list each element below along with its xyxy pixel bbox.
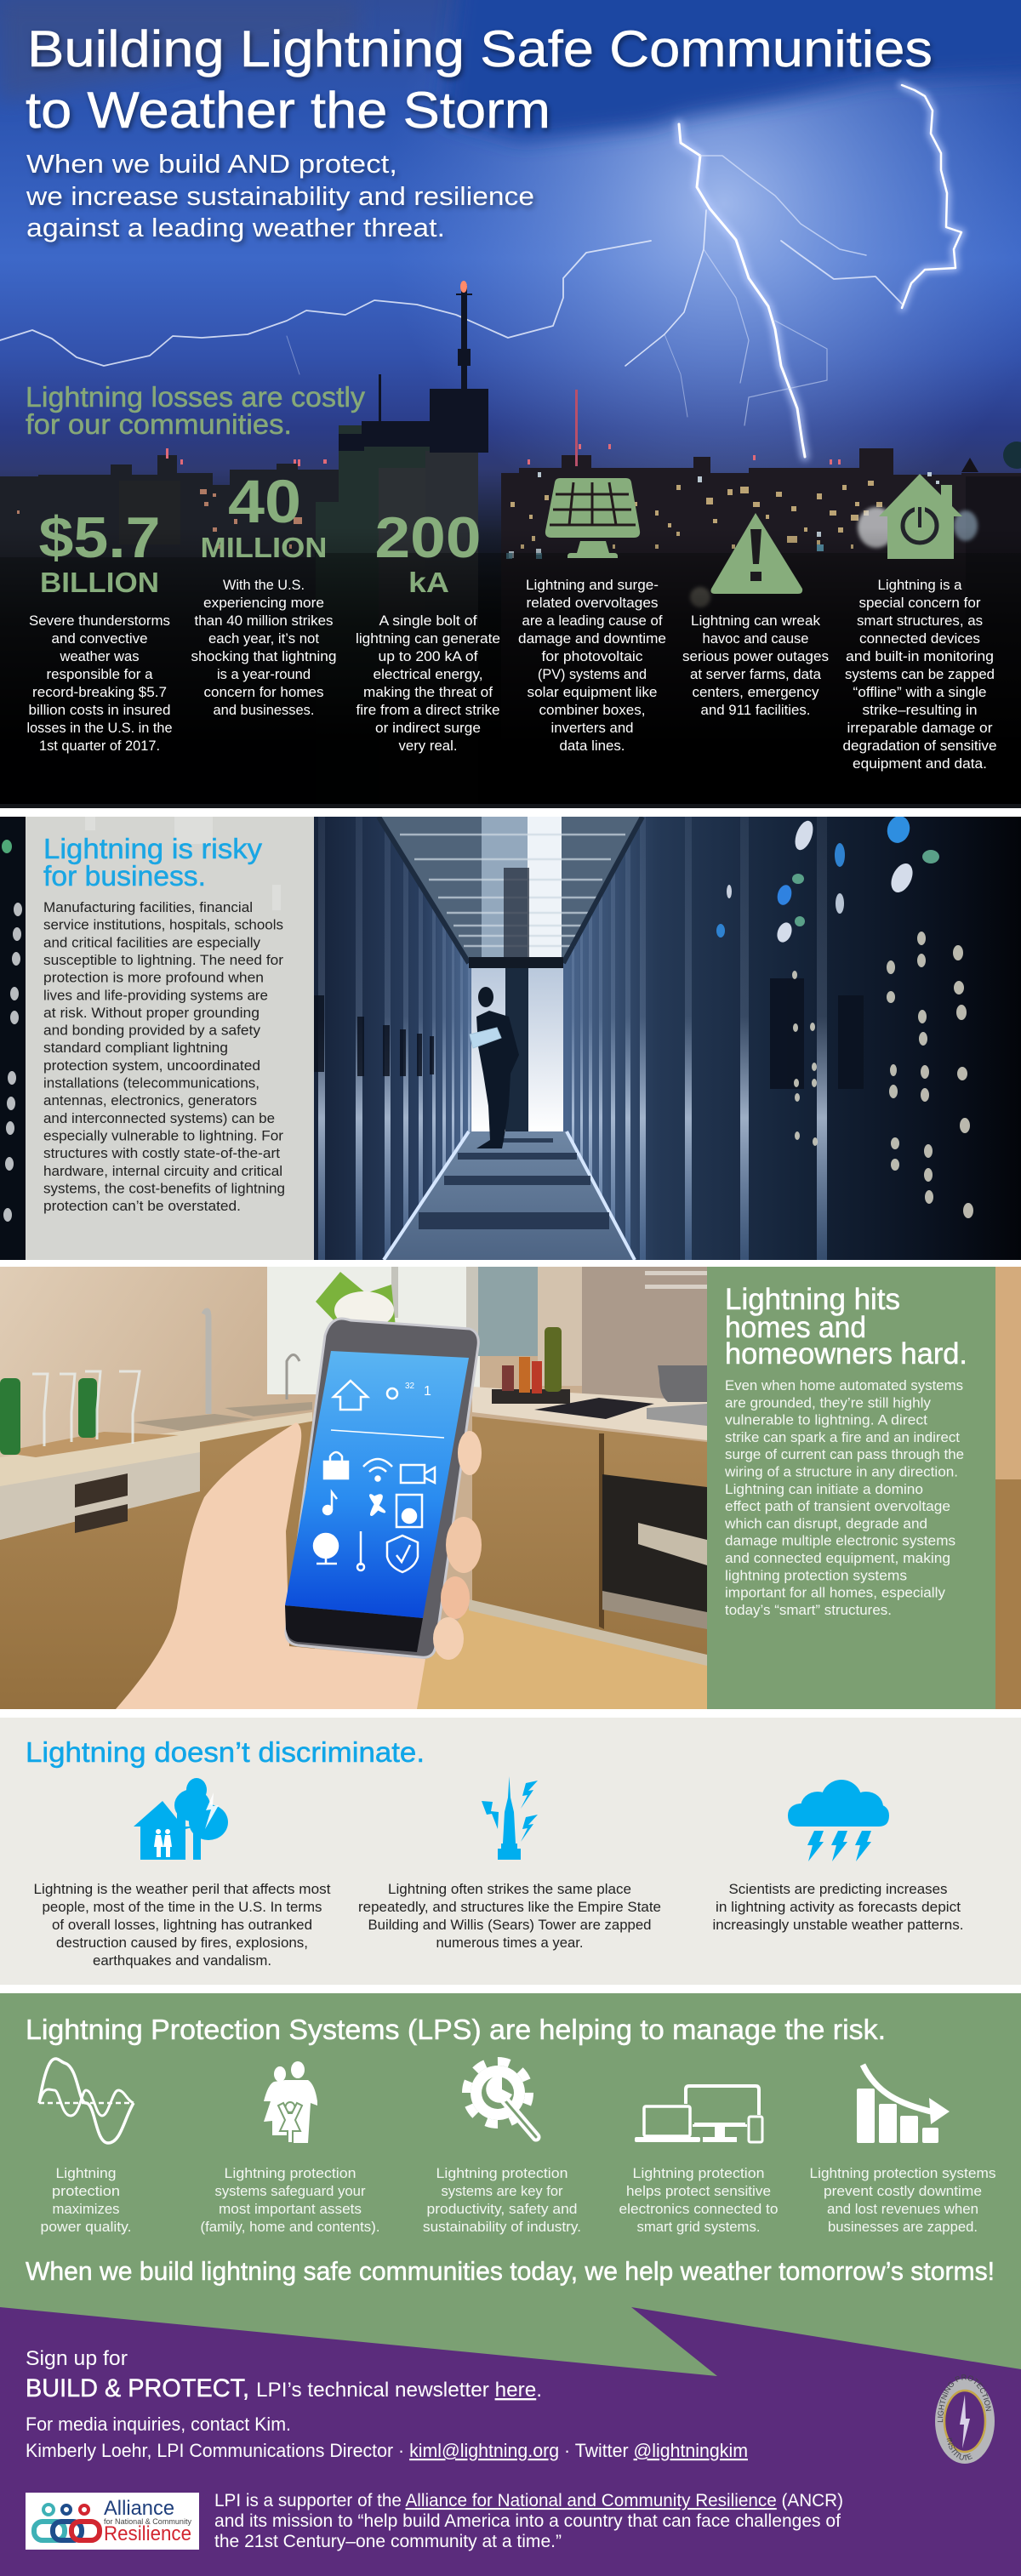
text: sensitive electronics: electronics connected to — [619, 2201, 778, 2217]
stat: solar overvoltage: combiner boxes, — [539, 702, 645, 718]
LPI seal: INSTITUTE — [946, 2438, 973, 2460]
text: sensitive electronics: Lightning protection — [633, 2165, 764, 2181]
stat: smart structures: special concern for — [859, 595, 981, 611]
title: to Weather the Storm — [26, 82, 550, 139]
text block: business risk: at risk. Without proper grounding — [43, 1005, 260, 1021]
panel: hero and lightning losses — [0, 0, 1021, 808]
stat: 40 million: With the U.S. — [223, 577, 305, 593]
text: industry: systems are key for — [441, 2183, 563, 2199]
stat: $5.7 billion — [27, 505, 172, 754]
stat: solar overvoltage: are a leading cause of — [522, 613, 663, 629]
stat: solar overvoltage: solar equipment like — [528, 684, 657, 700]
text block: business risk: hardware, internal circuity and critical — [43, 1163, 282, 1179]
heading: risky for business: for business. — [43, 860, 206, 892]
stat: 200 kA: very real. — [398, 738, 458, 754]
floor — [417, 1608, 707, 1709]
left cabinets — [0, 1421, 315, 1709]
stat: 200 kA: electrical energy, — [373, 666, 483, 682]
stat: power outages: serious power outages — [682, 648, 829, 664]
lightning bolts — [0, 85, 961, 457]
newsletter sign up: LPI’s technical newsletter here. — [256, 2379, 542, 2402]
text: same place repeatedly: Lightning often strikes the same place — [388, 1881, 631, 1897]
text block: business risk: especially vulnerable to lightning. For — [43, 1128, 283, 1143]
stat: 200 kA — [356, 505, 500, 754]
text block: home risk: wiring of a structure in any direction. — [724, 1463, 958, 1480]
stat: 40 million: MILLION — [201, 532, 327, 563]
text block: home risk: and connected equipment, making — [725, 1550, 950, 1566]
text: predicting increases: Scientists are predicting increases — [728, 1881, 948, 1897]
LPI seal: LIGHTNING PROTECTION — [938, 2374, 992, 2423]
stat: smart structures: and built-in monitoring — [846, 648, 994, 664]
heading: lightning losses: for our communities. — [26, 408, 292, 440]
right counter and appliances — [472, 1387, 707, 1440]
stat: 40 million: than 40 million strikes — [194, 613, 334, 629]
text: power quality: Lightning — [56, 2165, 116, 2181]
icon: declining bar chart — [857, 2065, 950, 2143]
text block: business risk: structures with costly state-of-the-art — [43, 1145, 280, 1161]
stat: 40 million: experiencing more — [203, 595, 324, 611]
text panel — [707, 1267, 995, 1709]
stat: smart structures: Lightning is a — [878, 577, 962, 593]
title: Building Lightning Safe Communities — [27, 20, 933, 77]
text: safeguard assets: (family, home and contents). — [201, 2219, 379, 2235]
stat: 40 million — [191, 469, 337, 718]
text block: home risk: Even when home automated systems — [725, 1377, 963, 1393]
stat: smart structures: systems can be zapped — [845, 666, 995, 682]
text: power quality: protection — [52, 2183, 120, 2199]
text: safeguard assets: systems safeguard your — [214, 2183, 366, 2199]
newsletter sign up: Sign up for — [26, 2347, 128, 2370]
heading: lightning losses: Lightning losses are costly — [26, 381, 366, 413]
ANCR statement — [214, 2491, 843, 2551]
media contact: Kimberly Loehr, LPI Communications Director · kiml@lightning.org · Twitter @lightningkim — [26, 2440, 748, 2461]
text: power quality: maximizes — [53, 2201, 119, 2217]
stat: smart structures: degradation of sensitive — [842, 738, 997, 754]
stat: smart structures: connected devices — [859, 630, 980, 647]
icon: gear and wrench — [466, 2061, 536, 2137]
text: downtime: Lightning protection systems — [810, 2165, 995, 2181]
subtitle — [26, 149, 534, 242]
text block: business risk: Manufacturing facilities, financial — [43, 899, 253, 915]
text: same place repeatedly: repeatedly, and structures like the Empire State — [358, 1899, 661, 1915]
stat: $5.7 billion: $5.7 — [39, 505, 160, 570]
subtitle: against a leading weather threat. — [26, 213, 445, 242]
stat: solar overvoltage: (PV) systems and — [538, 666, 647, 682]
text block: business risk: protection is more profound when — [43, 970, 264, 986]
stat: $5.7 billion: record-breaking $5.7 — [32, 684, 167, 700]
stat: $5.7 billion: losses in the U.S. in the — [27, 720, 172, 736]
stat: 40 million: is a year-round — [217, 666, 311, 682]
text block: home risk: are grounded, they’re still highly — [725, 1394, 931, 1411]
text: weather peril: Lightning is the weather peril that affects most — [34, 1881, 331, 1897]
stat: solar overvoltage: inverters and — [551, 720, 633, 736]
text: predicting increases: increasingly unstable weather patterns. — [713, 1917, 963, 1933]
ANCR logo: Alliance — [104, 2497, 174, 2520]
subtitle: we increase sustainability and resilience — [26, 181, 534, 211]
ANCR logo: Resilience — [104, 2522, 191, 2545]
text block: business risk: service institutions, hospitals, schools — [43, 917, 283, 933]
text: downtime: businesses are zapped. — [828, 2219, 978, 2235]
text block: business risk: and interconnected systems) can be — [43, 1110, 275, 1126]
text block: home risk: Lightning can initiate a domino — [725, 1481, 923, 1497]
text block: business risk: installations (telecommunications, — [43, 1075, 260, 1091]
text: industry: sustainability of industry. — [423, 2219, 581, 2235]
heading: hits homes — [725, 1283, 967, 1371]
stat: solar overvoltage — [518, 478, 666, 754]
text: same place repeatedly: numerous times a year. — [436, 1935, 584, 1951]
stat: solar overvoltage: damage and downtime — [518, 630, 666, 647]
heading: risky for business — [43, 833, 263, 892]
city skyline at night — [0, 281, 1021, 808]
stat: power outages — [682, 513, 829, 718]
stat: $5.7 billion: weather was — [60, 648, 140, 664]
stat: smart structures: equipment and data. — [853, 755, 987, 772]
stat: $5.7 billion: Severe thunderstorms — [29, 613, 170, 629]
stat: smart structures: “offline” with a single — [853, 684, 987, 700]
stat: smart structures — [842, 474, 997, 772]
ANCR logo: for National & Community — [104, 2517, 191, 2526]
ANCR logo — [26, 2493, 199, 2550]
text block: business risk: antennas, electronics, generators — [43, 1092, 257, 1108]
text block: home risk: damage multiple electronic systems — [725, 1533, 955, 1549]
kitchen photo — [0, 1267, 1021, 1709]
heading: Lightning Protection Systems (LPS) are helping to manage the risk. — [26, 2014, 886, 2045]
text block: business risk: susceptible to lightning. The need for — [43, 952, 283, 968]
radio tower — [339, 285, 488, 453]
faucets and glasses — [204, 1311, 208, 1414]
hand holding smartphone: 32 — [405, 1382, 415, 1391]
stat: smart structures: irreparable damage or — [847, 720, 993, 736]
LPI seal — [935, 2374, 995, 2464]
stat: solar overvoltage: related overvoltages — [526, 595, 659, 611]
title — [26, 29, 935, 134]
text: weather peril: of overall losses, lightning has outranked — [52, 1917, 312, 1933]
server rack lights — [716, 813, 973, 1218]
text: downtime: and lost revenues when — [827, 2201, 978, 2217]
stat: $5.7 billion: billion costs in insured — [29, 702, 170, 718]
icon: connected devices — [635, 2086, 762, 2142]
text block: home risk — [724, 1377, 964, 1618]
icon: family — [264, 2061, 317, 2143]
heading: hits homes: Lightning hits — [725, 1283, 900, 1316]
newsletter sign up — [26, 2347, 542, 2402]
hand holding smartphone — [116, 1319, 482, 1709]
icon: house, tree and family — [134, 1778, 228, 1860]
text: sensitive electronics — [619, 2165, 778, 2235]
phone app icons — [314, 1381, 444, 1572]
text panel — [26, 817, 314, 1260]
stat: 200 kA: fire from a direct strike — [356, 702, 500, 718]
icon: power sine waves — [39, 2059, 134, 2143]
text block: business risk: and critical facilities are especially — [43, 934, 260, 950]
stat: 200 kA: lightning can generate — [356, 630, 500, 647]
text: same place repeatedly: Building and Willis (Sears) Tower are zapped — [368, 1917, 652, 1933]
heading: hits homes: homes and — [725, 1311, 866, 1344]
stat: smart structures: strike–resulting in — [863, 702, 977, 718]
text block: business risk: lives and life-providing systems are — [43, 987, 268, 1003]
storm sky photo — [0, 0, 1021, 808]
heading: Lightning doesn’t discriminate. — [26, 1736, 425, 1768]
hand holding smartphone: 1 — [424, 1384, 431, 1399]
stat: 200 kA: A single bolt of — [379, 613, 477, 629]
icon: house with power button — [879, 474, 962, 559]
stat: 40 million: shocking that lightning — [191, 648, 337, 664]
stat: power outages: Lightning can wreak — [691, 613, 820, 629]
tree line — [0, 553, 712, 609]
ANCR statement: LPI is a supporter of the Alliance for National and Community Resilience (ANCR) — [214, 2491, 843, 2510]
panel: lightning hits homes — [0, 1267, 1021, 1709]
text block: business risk: and bonding provided by a safety — [43, 1023, 260, 1038]
text: sensitive electronics: smart grid systems. — [636, 2219, 761, 2235]
text block: business risk: standard compliant lightning — [43, 1040, 228, 1056]
plant — [316, 1272, 396, 1327]
stat: $5.7 billion: 1st quarter of 2017. — [39, 738, 160, 754]
left edge lights — [2, 840, 22, 1222]
left counter — [0, 1412, 312, 1489]
stat: solar overvoltage: for photovoltaic — [541, 648, 643, 664]
panel: sign up footer — [0, 2307, 1021, 2576]
text block: home risk: which can disrupt, degrade and — [724, 1515, 927, 1531]
text: power quality: power quality. — [41, 2219, 131, 2235]
media contact — [26, 2414, 748, 2461]
text: industry: Lightning protection — [436, 2165, 568, 2181]
ANCR statement: the 21st Century–one community at a time.” — [214, 2532, 562, 2551]
stat: $5.7 billion: responsible for a — [46, 666, 153, 682]
text block: business risk: systems, the cost-benefits of lightning — [43, 1181, 285, 1196]
text: weather peril: destruction caused by fires, explosions, — [56, 1935, 308, 1951]
text: industry: productivity, safety and — [427, 2201, 577, 2217]
text block: home risk: effect path of transient overvoltage — [725, 1498, 950, 1514]
subtitle: When we build AND protect, — [26, 149, 397, 179]
text: downtime — [810, 2165, 995, 2235]
person with laptop — [470, 987, 519, 1148]
text: downtime: prevent costly downtime — [824, 2183, 982, 2199]
city window lights — [510, 481, 894, 549]
icon: solar panel — [545, 478, 640, 558]
stat: power outages: centers, emergency — [693, 684, 819, 700]
stat: 40 million: each year, it’s not — [208, 630, 319, 647]
text: weather peril: earthquakes and vandalism. — [93, 1952, 271, 1969]
stat: smart structures: smart structures, as — [857, 613, 983, 629]
text: safeguard assets: most important assets — [219, 2201, 362, 2217]
stat: power outages: at server farms, data — [690, 666, 822, 682]
icon: tower struck by lightning — [482, 1776, 538, 1860]
stat: solar overvoltage: Lightning and surge- — [526, 577, 659, 593]
text block: home risk: strike can spark a fire and an indirect — [725, 1429, 960, 1445]
stat: 200 kA: 200 — [374, 505, 482, 570]
stat: $5.7 billion: BILLION — [40, 567, 159, 598]
stat: 200 kA: or indirect surge — [375, 720, 481, 736]
text: weather peril — [34, 1881, 331, 1969]
stat: 200 kA: kA — [408, 567, 449, 598]
closing statement: When we build lightning safe communities today, we help weather tomorrow’s storms! — [26, 2256, 995, 2286]
text block: home risk: surge of current can pass through the — [725, 1446, 964, 1462]
panel: lightning is risky for business — [0, 813, 1021, 1260]
text: predicting increases — [713, 1881, 963, 1933]
text: safeguard assets — [201, 2165, 379, 2235]
text: weather peril: people, most of the time in the U.S. In terms — [43, 1899, 322, 1915]
text: predicting increases: in lightning activity as forecasts depict — [716, 1899, 961, 1915]
text block: business risk: protection can’t be overstated. — [43, 1198, 241, 1214]
text block: home risk: today’s “smart” structures. — [725, 1602, 892, 1618]
stat: 40 million: and businesses. — [213, 702, 315, 718]
text block: home risk: important for all homes, especially — [725, 1585, 945, 1601]
heading: risky for business: Lightning is risky — [43, 833, 263, 864]
ANCR statement: and its mission to “help build America into a country that can face challenges of — [214, 2511, 841, 2531]
text: sensitive electronics: helps protect sensitive — [626, 2183, 771, 2199]
stat: 200 kA: up to 200 kA of — [378, 648, 478, 664]
stat: power outages: and 911 facilities. — [701, 702, 810, 718]
newsletter sign up: BUILD & PROTECT, — [26, 2374, 249, 2402]
text block: home risk: vulnerable to lightning. A direct — [725, 1412, 927, 1428]
text: industry — [423, 2165, 581, 2235]
text block: business risk: protection system, uncoordinated — [43, 1057, 260, 1074]
stat: 40 million: concern for homes — [204, 684, 323, 700]
stat: $5.7 billion: and convective — [51, 630, 148, 647]
icon: storm cloud — [788, 1780, 889, 1861]
data center photo — [0, 813, 1021, 1260]
stat: power outages: havoc and cause — [703, 630, 808, 647]
text: same place repeatedly — [358, 1881, 661, 1951]
panel: lightning doesn't discriminate — [0, 1718, 1021, 1985]
media contact: For media inquiries, contact Kim. — [26, 2414, 291, 2435]
stat: 200 kA: making the threat of — [363, 684, 493, 700]
text: safeguard assets: Lightning protection — [225, 2165, 356, 2181]
panel: lightning protection systems — [0, 1993, 1021, 2376]
text block: home risk: lightning protection systems — [725, 1567, 907, 1583]
text block: business risk — [43, 899, 285, 1214]
heading: lightning losses — [26, 386, 366, 434]
icon: warning triangle — [711, 513, 802, 594]
stat: 40 million: 40 — [228, 469, 301, 536]
stat: solar overvoltage: data lines. — [560, 738, 625, 754]
heading: hits homes: homeowners hard. — [725, 1337, 967, 1371]
text: power quality — [41, 2165, 131, 2235]
